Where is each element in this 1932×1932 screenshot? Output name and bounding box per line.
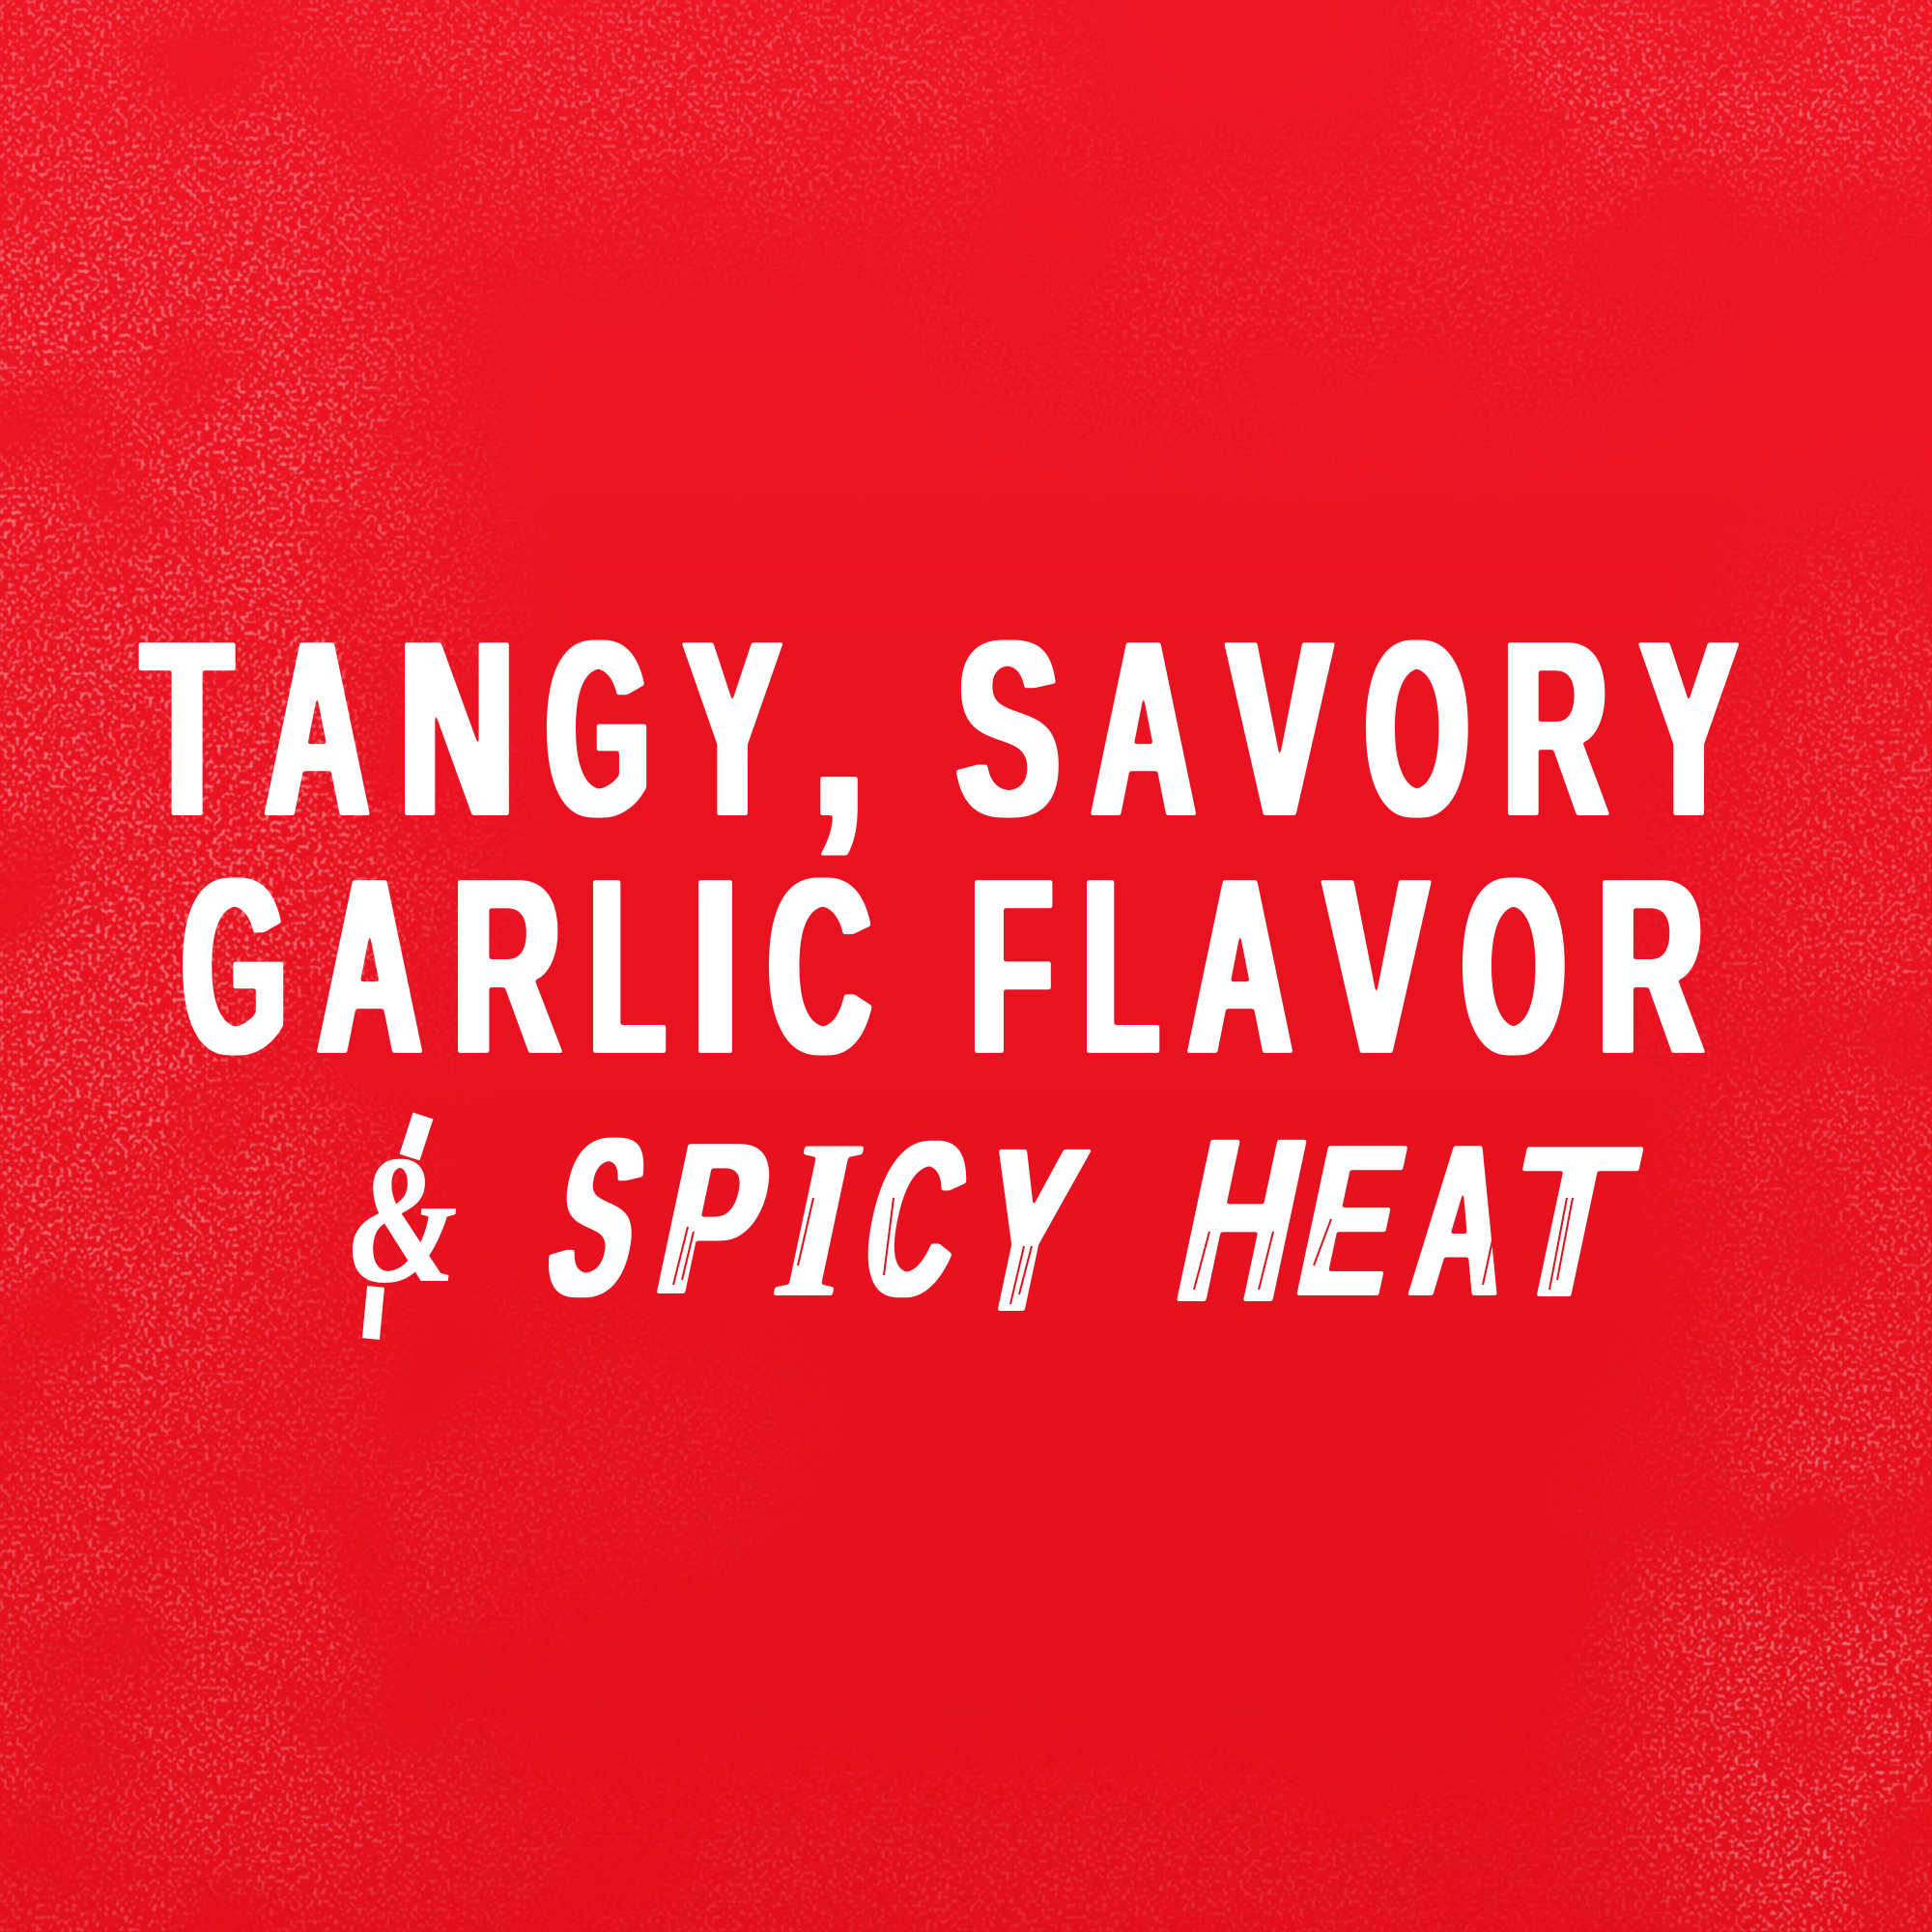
words: spicy heat: [530, 1088, 1652, 1361]
ampersand with vertical strokes: &: [351, 1119, 456, 1321]
heading line 2: R: [1598, 827, 1704, 1107]
heading line 2: L: [589, 827, 665, 1107]
heading line 2: R: [453, 827, 561, 1107]
words: spicy heat: S: [530, 1093, 664, 1344]
heading line 2: F: [971, 826, 1053, 1107]
heading line 1: R: [1503, 589, 1608, 869]
heading line 2: C: [768, 825, 871, 1106]
heading line 2: V: [1324, 825, 1428, 1106]
heading line 1: Y: [1640, 588, 1737, 868]
words: spicy heat: T: [1488, 1100, 1652, 1343]
heading line 1: [142, 582, 1737, 870]
words: spicy heat: E: [1282, 1100, 1421, 1343]
heading line 1: N: [399, 588, 515, 869]
words: spicy heat: A: [1404, 1098, 1517, 1342]
heading: tangy, savory garlic flavor: [142, 582, 1737, 1107]
words: spicy heat: P: [640, 1098, 788, 1341]
brush streaks: [673, 1198, 1573, 1304]
heading line 2: A: [1188, 825, 1292, 1106]
heading line 1: A: [1092, 587, 1195, 868]
words: spicy heat: C: [845, 1095, 985, 1343]
heading line 1: Y: [684, 588, 781, 868]
heading line 1: V: [1228, 587, 1331, 868]
heading line 2: G: [182, 827, 287, 1107]
heading line 1: S: [956, 587, 1060, 868]
words: spicy heat: H: [1160, 1088, 1324, 1351]
heading line 2: A: [318, 825, 421, 1106]
script line: & spicy heat: [351, 1088, 1652, 1361]
heading line 1: O: [1365, 589, 1468, 869]
words: spicy heat: Y: [955, 1098, 1101, 1361]
heading line 1: G: [546, 589, 650, 869]
words: spicy heat: I: [761, 1093, 877, 1345]
heading line 2: I: [692, 826, 739, 1106]
heading line 2: [182, 825, 1704, 1107]
heading line 2: L: [1084, 827, 1158, 1107]
heading line 1: ,: [811, 582, 866, 870]
heading line 2: O: [1462, 827, 1565, 1107]
heading line 1: T: [142, 589, 232, 869]
heading line 1: A: [265, 587, 369, 868]
